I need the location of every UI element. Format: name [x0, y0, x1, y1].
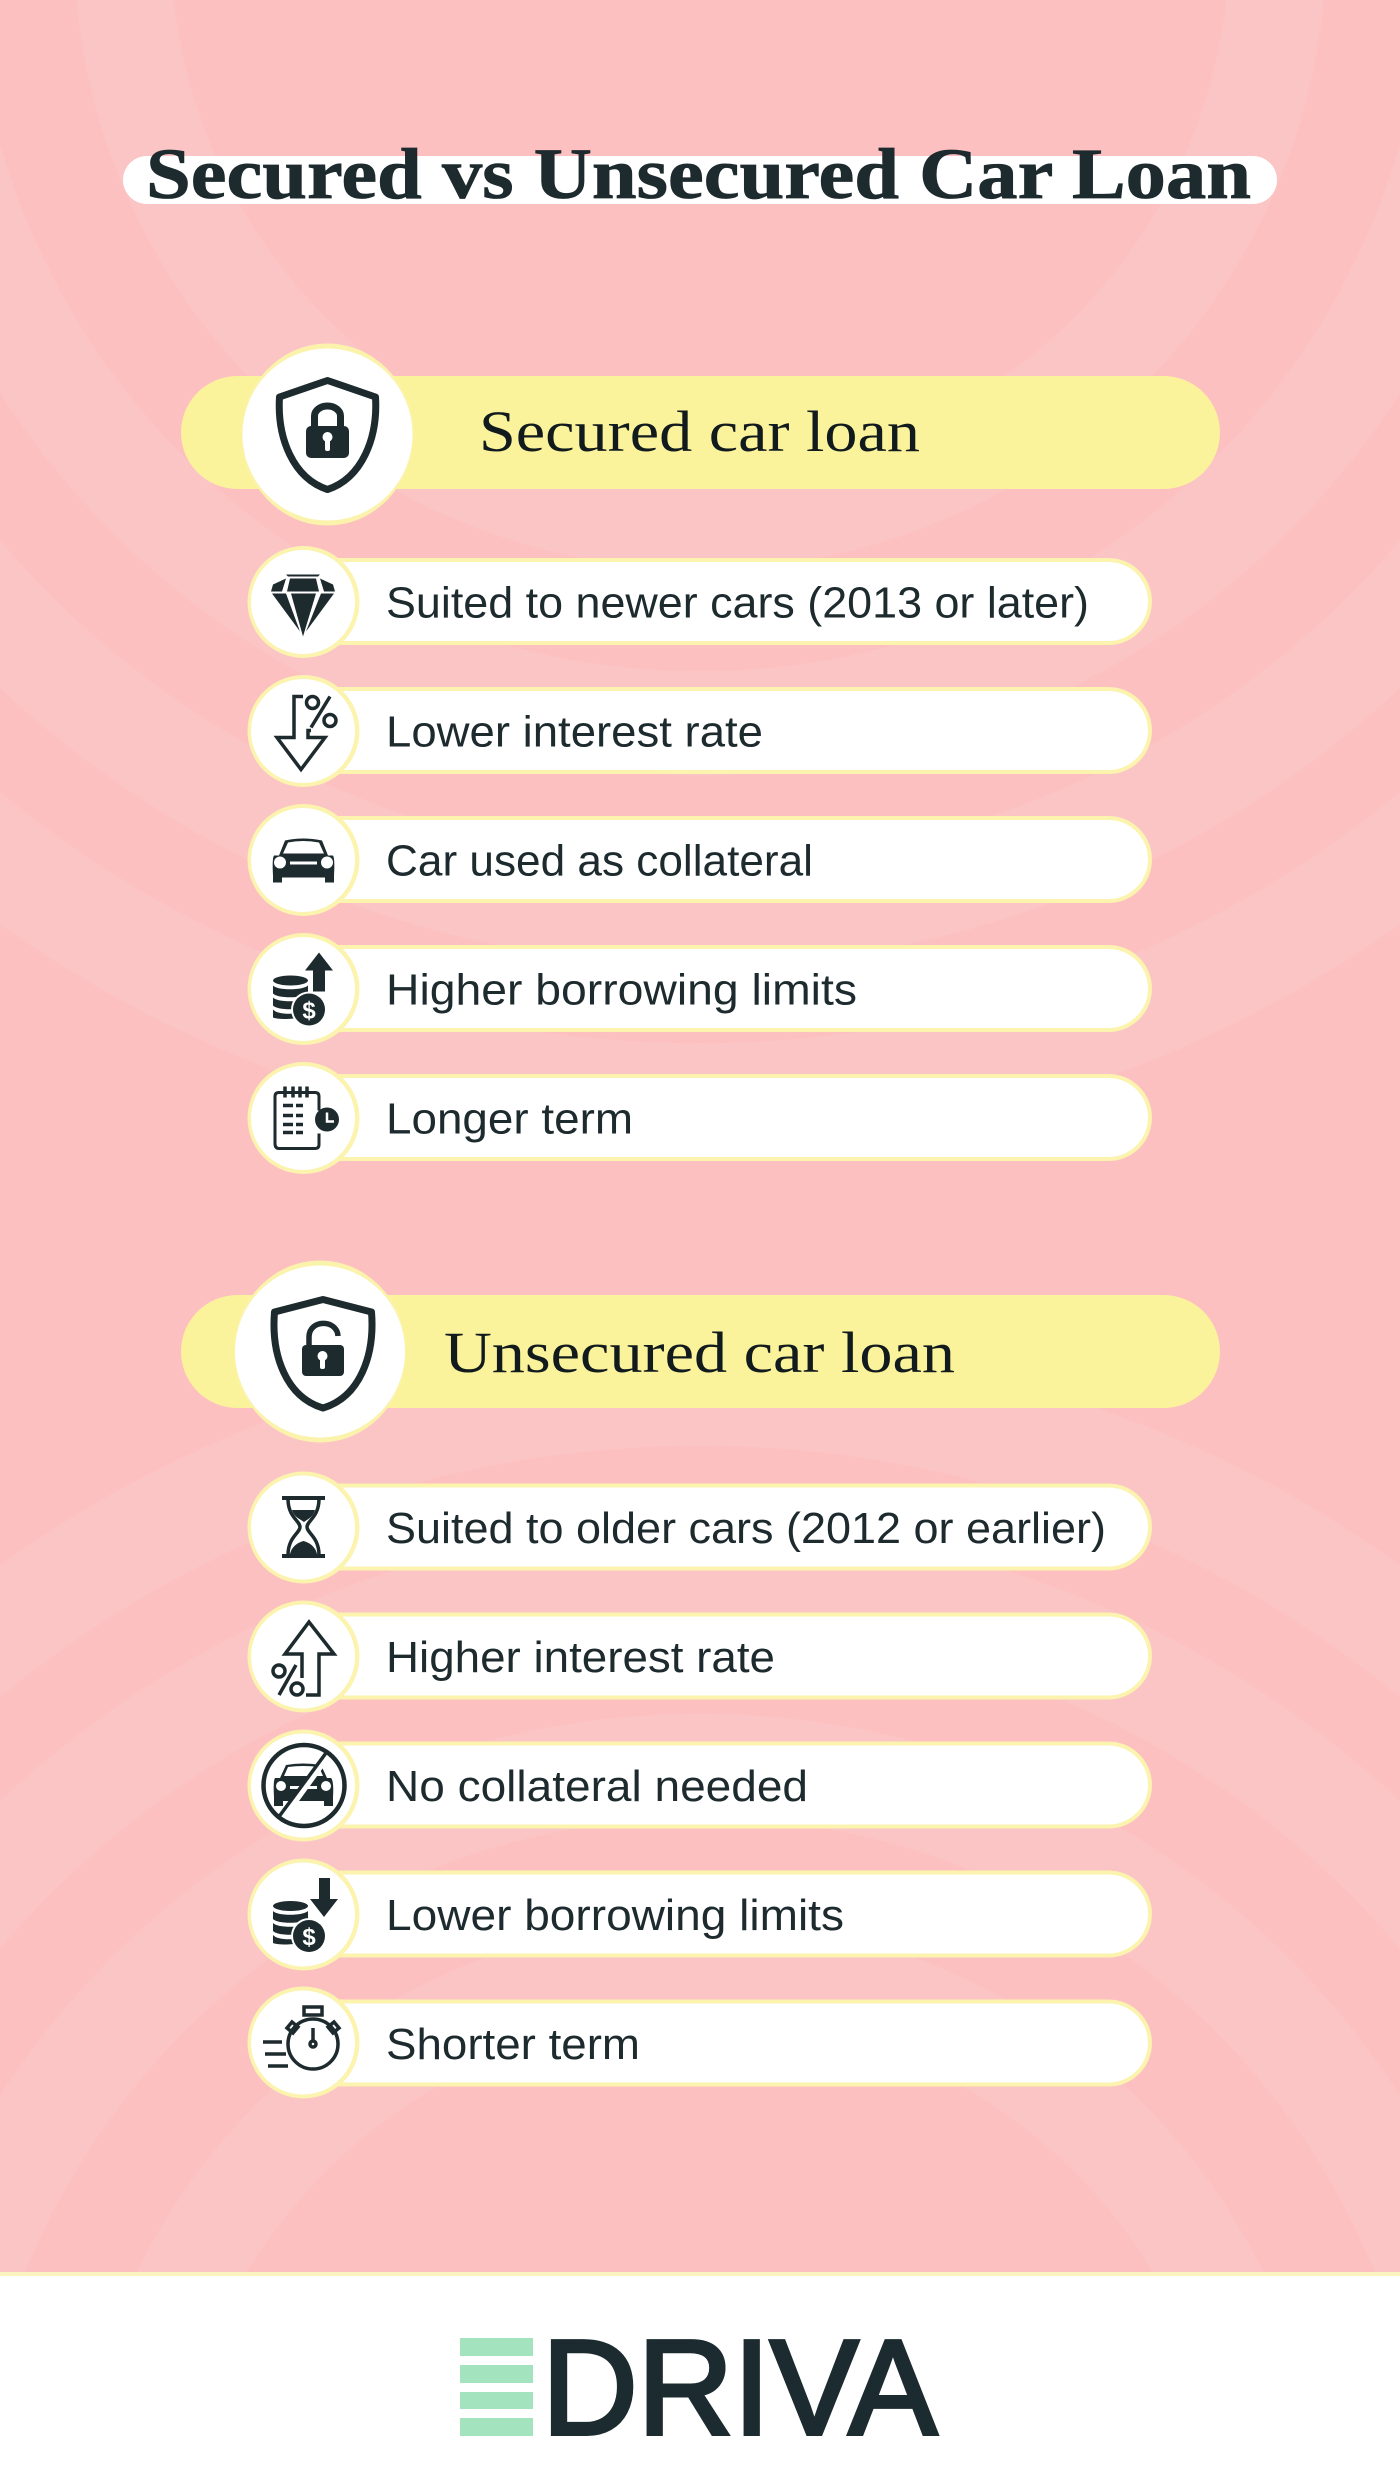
icon: coins with down arrow — [273, 1878, 338, 1954]
icon: car — [273, 838, 334, 882]
panel: secured car loan — [181, 344, 1220, 1174]
icon: shield with closed lock — [279, 380, 376, 490]
logo mark — [460, 2338, 533, 2436]
row: longer term — [248, 1062, 1150, 1174]
row: higher borrowing limits — [248, 933, 1150, 1045]
label: Longer term — [386, 1094, 633, 1144]
label: No collateral needed — [386, 1762, 808, 1811]
icon: crossed out car — [264, 1745, 344, 1826]
label: Suited to older cars (2012 or earlier) — [386, 1504, 1106, 1553]
row: suited to newer cars — [248, 546, 1150, 658]
row: car used as collateral — [248, 804, 1150, 916]
icon: stopwatch — [263, 2007, 339, 2069]
panel: unsecured car loan — [181, 1260, 1220, 2098]
row: shorter term — [248, 1986, 1150, 2098]
row: suited to older cars — [248, 1472, 1150, 1584]
label: Lower borrowing limits — [386, 1891, 844, 1940]
label: Suited to newer cars (2013 or later) — [386, 578, 1089, 628]
label: Higher interest rate — [386, 1633, 775, 1682]
icon: diamond — [271, 574, 335, 636]
logo wordmark: DRIVA — [542, 2312, 937, 2463]
label: Lower interest rate — [386, 708, 763, 756]
label: Car used as collateral — [386, 836, 813, 886]
footer — [0, 2272, 1400, 2489]
row: lower borrowing limits — [248, 1858, 1150, 1970]
icon: coins with down arrow: $ — [302, 1924, 316, 1951]
icon: coins with up arrow: $ — [302, 998, 316, 1024]
title: Secured vs Unsecured Car Loan — [146, 134, 1251, 214]
heading: unsecured car loan: Unsecured car loan — [444, 1320, 955, 1385]
icon: coins with up arrow — [273, 952, 333, 1028]
icon: arrow down with percent — [277, 696, 336, 770]
icon: hourglass — [282, 1498, 325, 1556]
row: higher interest rate — [248, 1600, 1150, 1712]
heading: secured car loan — [181, 344, 1220, 526]
label: Higher borrowing limits — [386, 966, 857, 1014]
heading: secured car loan: Secured car loan — [479, 399, 920, 464]
heading: unsecured car loan — [181, 1260, 1220, 1442]
icon: shield with open lock — [274, 1300, 372, 1408]
row: no collateral needed — [248, 1730, 1150, 1842]
label: Shorter term — [386, 2020, 640, 2069]
icon: calendar with clock — [275, 1086, 339, 1148]
row: lower interest rate — [248, 675, 1150, 787]
icon: arrow up with percent — [273, 1622, 334, 1695]
